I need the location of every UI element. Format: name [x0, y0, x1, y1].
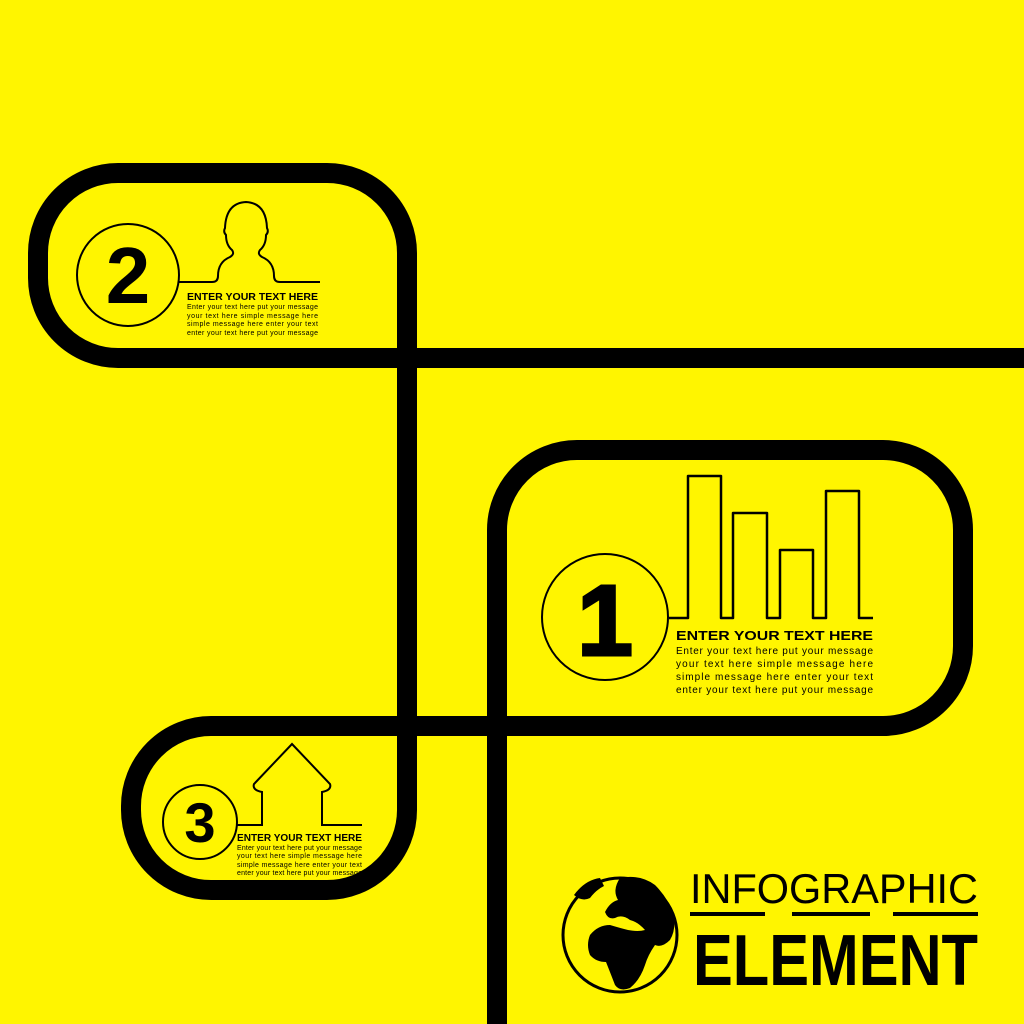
icon: person: [179, 202, 320, 282]
text block 1: Enter your text here put your message: [676, 646, 873, 657]
text block 2: ENTER YOUR TEXT HERE: [187, 291, 318, 303]
text block 1: enter your text here put your message: [676, 685, 873, 696]
title: INFOGRAPHIC ELEMENT: INFOGRAPHIC: [690, 865, 978, 912]
number circle 2: 2: [106, 231, 150, 320]
number circle 1: 1: [577, 565, 633, 677]
text block 1: simple message here enter your text: [676, 672, 873, 683]
bar chart: [669, 476, 873, 618]
text block 3: ENTER YOUR TEXT HERE: [237, 833, 362, 844]
panel: step 3: [163, 744, 362, 877]
text block 1: your text here simple message here: [676, 659, 873, 670]
number circle 2: [77, 224, 179, 326]
text block 2: simple message here enter your text: [187, 321, 318, 328]
text block 3: simple message here enter your text: [237, 862, 362, 869]
icon: house: [237, 744, 362, 825]
panel: step 2: [77, 202, 320, 337]
text block 3: Enter your text here put your message: [237, 845, 362, 852]
text block 3: [237, 833, 362, 877]
text block 2: your text here simple message here: [187, 313, 318, 320]
text block 3: your text here simple message here: [237, 853, 362, 860]
title: INFOGRAPHIC ELEMENT: [690, 865, 978, 1001]
text block 1: [676, 628, 873, 696]
number circle 3: [163, 785, 237, 859]
icon: globe: [563, 877, 677, 992]
text block 2: enter your text here put your message: [187, 330, 318, 337]
number circle 1: [542, 554, 668, 680]
text block 2: Enter your text here put your message: [187, 304, 318, 311]
text block 3: enter your text here put your message: [237, 870, 362, 877]
text block 1: ENTER YOUR TEXT HERE: [676, 628, 873, 643]
number circle 3: 3: [184, 791, 216, 854]
text block 2: [187, 291, 318, 337]
panel: step 1: [542, 476, 873, 696]
